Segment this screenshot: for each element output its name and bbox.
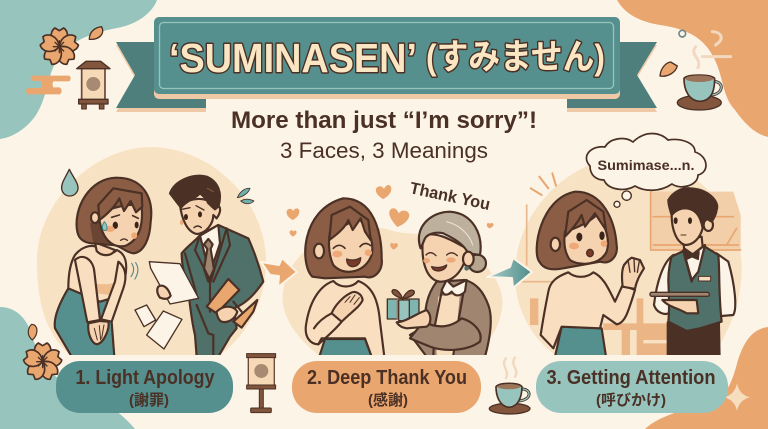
label pill: deep thank you: 2. Deep Thank You <box>307 367 467 389</box>
thought bubble <box>586 134 706 190</box>
thought bubble small circles <box>622 191 631 200</box>
subtitle bold: More than just “I’m sorry”! <box>231 107 537 134</box>
ribbon tail left <box>116 45 206 112</box>
panel: getting attention <box>515 157 750 411</box>
icon: cloud strips <box>26 76 71 94</box>
icon: bottom left blossom and petal <box>22 324 276 413</box>
thank you speech text: Thank You <box>408 178 492 214</box>
icon: bottom coffee cup <box>489 358 530 414</box>
attention marks <box>531 173 556 195</box>
subtitle regular: 3 Faces, 3 Meanings <box>280 138 488 163</box>
hearts <box>287 185 494 250</box>
grandmother <box>387 212 491 357</box>
motion lines <box>131 263 138 279</box>
orange folder <box>207 279 239 313</box>
label pill: light apology: 1. Light Apology <box>76 367 215 389</box>
panel: light apology <box>37 147 266 357</box>
icon: steam <box>694 32 731 68</box>
label pill: getting attention <box>536 361 728 413</box>
gift box <box>387 290 419 321</box>
label pill: light apology <box>56 361 233 413</box>
waiter <box>650 188 735 357</box>
ribbon tail right <box>567 45 657 112</box>
circle background <box>37 147 266 355</box>
label pill: getting attention: 3. Getting Attention <box>546 367 716 389</box>
icon: sparkle <box>724 383 750 411</box>
icon: petal <box>660 62 677 76</box>
young woman <box>305 198 384 357</box>
icon: petal <box>28 324 37 340</box>
woman raising hand <box>537 192 644 357</box>
circle background <box>515 157 742 355</box>
icon: falling petal <box>89 27 103 39</box>
falling papers <box>135 305 182 349</box>
icon: steam <box>504 358 516 378</box>
icon: lantern <box>77 61 110 109</box>
title ribbon banner <box>116 17 657 112</box>
label pill: light apology: (謝罪) <box>129 392 169 409</box>
label pill: deep thank you: (感謝) <box>368 391 408 409</box>
icon: top right decorations and coffee cup <box>660 30 731 110</box>
paper held <box>149 262 199 304</box>
thought text: Sumimase...n. <box>598 157 694 173</box>
woman bowing <box>55 178 151 357</box>
icon: cherry blossom top left <box>26 27 110 109</box>
hand left <box>157 286 171 299</box>
arrow: teal <box>487 258 532 288</box>
restaurant background <box>520 192 741 355</box>
corner blob: top left teal <box>0 0 157 139</box>
ribbon main band <box>154 21 620 99</box>
icon: water drop <box>62 169 78 196</box>
corner blob: bottom left teal <box>0 307 135 429</box>
label pill: deep thank you <box>292 361 481 413</box>
man in suit <box>149 176 263 357</box>
arrow: orange <box>261 258 297 287</box>
icon: sweat marks <box>237 188 254 204</box>
title text: (すみません) <box>426 38 605 77</box>
panel: deep thank you <box>283 178 503 357</box>
icon: coffee cup <box>677 75 721 110</box>
label pill: getting attention: (呼びかけ) <box>596 392 666 409</box>
icon: standing lantern sign <box>247 354 276 413</box>
heart shaped background <box>283 228 503 355</box>
hand right <box>217 307 237 322</box>
title text <box>169 35 605 81</box>
corner blob: bottom right orange <box>645 327 768 429</box>
title text: ‘SUMINASEN’ <box>169 35 417 81</box>
corner blob: top right orange <box>617 0 768 137</box>
